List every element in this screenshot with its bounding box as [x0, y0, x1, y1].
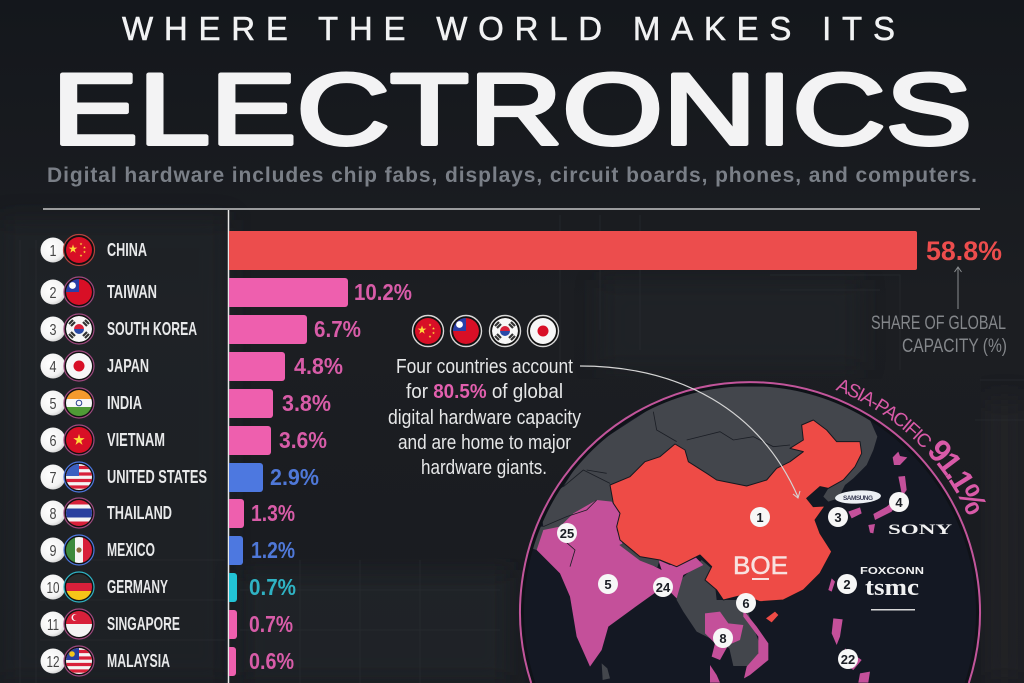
row 1: China: 1: [50, 243, 57, 260]
row 4: Japan: JAPAN: [107, 356, 149, 376]
row 6: Vietnam: [40, 425, 327, 455]
row 7: United States: [40, 462, 319, 492]
row 4: Japan: 4.8%: [294, 353, 343, 379]
land: mainland southeast asia: [677, 560, 761, 666]
row 2: Taiwan: 10.2%: [354, 279, 412, 305]
row 4: Japan: 4: [50, 359, 57, 376]
row 8: Thailand: [40, 498, 295, 528]
subtitle: Digital hardware includes chip fabs, displays, circuit boards, phones, and computers.: [47, 164, 977, 187]
row 8: Thailand: 1.3%: [251, 500, 295, 526]
row 2: Taiwan: [40, 277, 412, 307]
row 12: Malaysia: MALAYSIA: [107, 651, 170, 671]
land: sri lanka: [602, 663, 610, 680]
row 2: Taiwan: 2: [50, 285, 57, 302]
map markers: [557, 492, 909, 669]
nepal: [619, 542, 659, 567]
row 6: Vietnam: VIETNAM: [107, 430, 165, 450]
row 11: Singapore: SINGAPORE: [107, 614, 180, 634]
row 9: Mexico: MEXICO: [107, 540, 155, 560]
map markers: 25: [560, 526, 574, 541]
callout text: hardware giants.: [421, 457, 547, 479]
china: [610, 420, 862, 602]
title: electronics: ELECTRONICS: [52, 54, 972, 166]
row 2: Taiwan: TAIWAN: [107, 282, 157, 302]
callout text: for 80.5% of global: [406, 381, 563, 403]
hainan: [766, 612, 778, 622]
thailand, vietnam, malaysia: [705, 612, 743, 660]
row 8: Thailand: THAILAND: [107, 503, 172, 523]
arrow: callout to china: [580, 366, 798, 497]
row 10: Germany: GERMANY: [107, 577, 168, 597]
callout text: [388, 356, 581, 479]
logo: BOE: BOE: [733, 552, 788, 580]
axis note: share of global capacity: [871, 267, 1007, 357]
country borders: [543, 412, 790, 567]
map markers: 2: [843, 577, 851, 592]
row 7: United States: 7: [50, 470, 57, 487]
row 5: India: 3.8%: [282, 390, 331, 416]
land: surrounding countries: [527, 387, 877, 550]
logo: Samsung: [835, 489, 881, 505]
callout text: Four countries account: [396, 356, 573, 378]
callout text: and are home to major: [398, 432, 571, 454]
row 11: Singapore: 0.7%: [249, 611, 293, 637]
title: where the world makes its: WHERE THE WORLD MAKES ITS: [122, 10, 895, 47]
row 5: India: 5: [50, 396, 57, 413]
row 5: India: INDIA: [107, 393, 142, 413]
row 3: South Korea: 6.7%: [314, 316, 361, 342]
row 3: South Korea: [40, 314, 361, 344]
row 9: Mexico: [40, 535, 295, 565]
top four country flags: [412, 316, 558, 346]
map: asia-pacific globe: [520, 382, 980, 683]
map markers: 22: [841, 652, 855, 667]
row 11: Singapore: [40, 609, 293, 639]
row 10: Germany: 0.7%: [249, 574, 296, 600]
row 7: United States: UNITED STATES: [107, 467, 207, 487]
map markers: 3: [834, 510, 842, 525]
row 6: Vietnam: 3.6%: [279, 427, 327, 453]
logo: TSMC: tsmc: [865, 575, 919, 601]
row 7: United States: 2.9%: [270, 464, 319, 490]
logo: TSMC: [865, 575, 919, 610]
row 12: Malaysia: [40, 646, 294, 676]
row 1: China: [40, 231, 1002, 270]
row 1: China: CHINA: [107, 240, 147, 260]
row 9: Mexico: 1.2%: [251, 537, 295, 563]
logo: Samsung: SAMSUNG: [843, 495, 873, 502]
row 4: Japan: [40, 351, 343, 381]
row 6: Vietnam: 6: [50, 433, 57, 450]
logo: Sony: SONY: [888, 522, 952, 538]
taiwan, korea, japan, philippines: [828, 578, 835, 592]
row 12: Malaysia: 12: [46, 654, 60, 671]
chart axis: [43, 209, 980, 683]
india and pakistan: [537, 500, 703, 667]
row 8: Thailand: 8: [50, 506, 57, 523]
row 12: Malaysia: 0.6%: [249, 648, 294, 674]
logo: Foxconn: FOXCONN: [860, 566, 924, 577]
map markers: 4: [895, 495, 903, 510]
row 3: South Korea: SOUTH KOREA: [107, 319, 197, 339]
callout text: digital hardware capacity: [388, 407, 581, 429]
map markers: 5: [604, 577, 612, 592]
map markers: 8: [719, 631, 727, 646]
row 10: Germany: 10: [46, 580, 60, 597]
row 3: South Korea: 3: [50, 322, 57, 339]
curved label: asia-pacific share: ASIA-PACIFIC 91.1%: [835, 380, 986, 514]
map markers: 1: [756, 510, 764, 525]
row 1: China: 58.8%: [926, 236, 1002, 266]
bar chart: share of global capacity: [40, 231, 1002, 676]
map markers: 6: [742, 596, 750, 611]
row 11: Singapore: 11: [47, 617, 59, 634]
row 9: Mexico: 9: [50, 543, 57, 560]
row 10: Germany: [40, 572, 296, 602]
map markers: 24: [656, 580, 671, 595]
row 5: India: [40, 388, 331, 418]
